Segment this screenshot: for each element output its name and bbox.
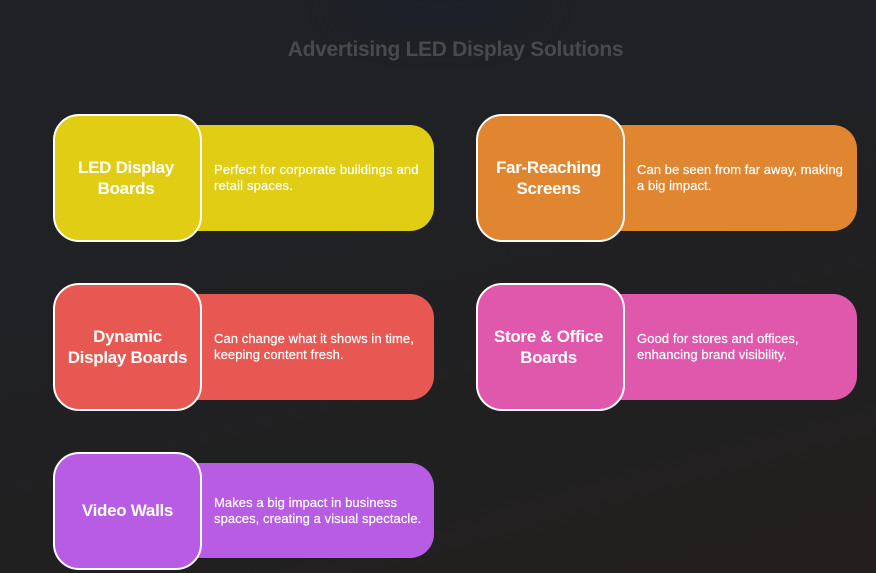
panel: Far-Reaching Screens	[476, 114, 857, 242]
heading: Dynamic Display Boards: Dynamic	[93, 327, 162, 346]
description: Dynamic Display Boards: Can change what it shows in time,	[214, 331, 414, 346]
description: LED Display Boards: retail spaces.	[214, 178, 293, 193]
description: Video Walls	[190, 463, 434, 558]
heading: Video Walls	[53, 452, 202, 570]
description: Dynamic Display Boards	[190, 294, 434, 400]
description: Far-Reaching Screens	[613, 125, 857, 231]
heading: Dynamic Display Boards	[53, 283, 202, 411]
heading: Store & Office Boards: Store & Office	[494, 327, 603, 346]
heading: Store & Office Boards: Boards	[520, 348, 577, 367]
heading: Far-Reaching Screens	[476, 114, 625, 242]
description: Far-Reaching Screens: Can be seen from far away, making	[637, 162, 843, 177]
panel: Dynamic Display Boards	[53, 283, 434, 411]
description: LED Display Boards: Perfect for corporate buildings and	[214, 162, 419, 177]
description: Video Walls: Makes a big impact in business	[214, 495, 397, 510]
heading: Video Walls: Video Walls	[82, 500, 173, 520]
description: Store & Office Boards: Good for stores and offices,	[637, 331, 799, 346]
heading: Far-Reaching Screens: Far-Reaching	[496, 158, 601, 177]
description: Far-Reaching Screens: a big impact.	[637, 178, 711, 193]
heading: LED Display Boards: Boards	[98, 179, 154, 198]
title: Advertising LED Display Solutions	[288, 38, 623, 61]
heading: Dynamic Display Boards: Display Boards	[68, 348, 187, 367]
panel: LED Display Boards	[53, 114, 434, 242]
heading: Far-Reaching Screens: Screens	[516, 179, 581, 198]
heading: Store & Office Boards	[476, 283, 625, 411]
description: LED Display Boards	[190, 125, 434, 231]
description: Store & Office Boards: enhancing brand visibility.	[637, 347, 787, 362]
heading: LED Display Boards: LED Display	[78, 158, 174, 177]
panel: Store & Office Boards	[476, 283, 857, 411]
panel: Video Walls	[53, 452, 434, 570]
description: Store & Office Boards	[613, 294, 857, 400]
heading: LED Display Boards	[53, 114, 202, 242]
description: Dynamic Display Boards: keeping content fresh.	[214, 347, 344, 362]
description: Video Walls: spaces, creating a visual spectacle.	[214, 511, 421, 526]
